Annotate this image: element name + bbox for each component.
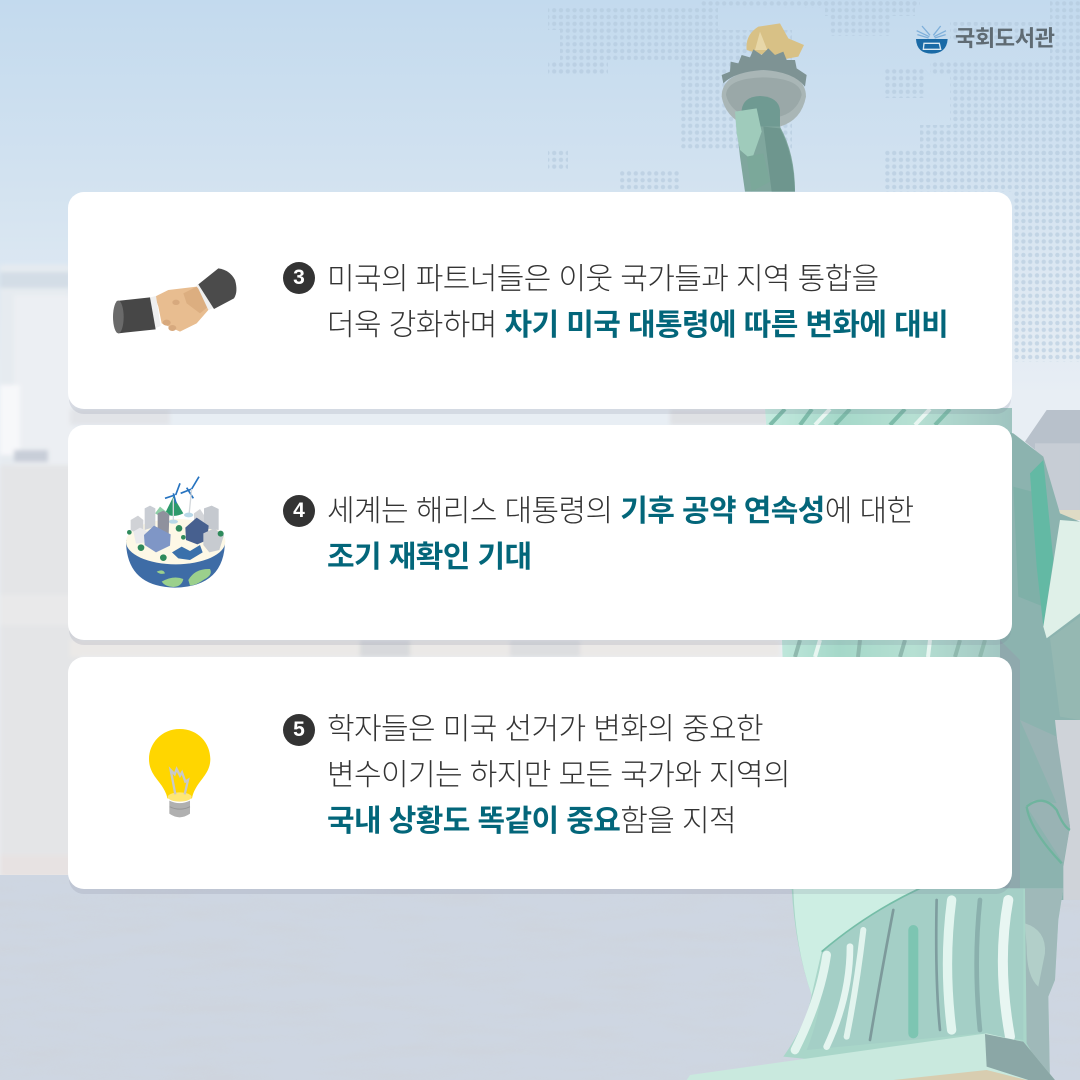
statue: robe and base [687,888,1063,1080]
statue: upper body behind cards [765,408,1012,890]
panel: item 3 [68,192,1012,409]
number badge 4: 4 [293,499,305,522]
text: item 5: 학자들은 미국 선거가 변화의 중요한 [327,713,763,746]
number badge 5 [283,714,315,746]
number badge 5: 5 [293,718,305,741]
number badge 3: 3 [293,266,305,289]
statue: torch and arm [722,23,807,192]
text: item 5: 변수이기는 하지만 모든 국가와 지역의 [327,759,790,792]
dotted world map [548,0,1080,362]
text: item 4: 조기 재확인 기대 [327,541,531,574]
text: item 4 [327,495,913,574]
right strip: building and statue side [1000,410,1080,900]
city skyline [0,265,780,877]
water [0,875,1080,1080]
logo: National Assembly Library [916,26,1055,54]
icon: light bulb [149,729,210,818]
text: item 5 [327,713,790,838]
number badge 3 [283,262,315,294]
text: item 3: 미국의 파트너들은 이웃 국가들과 지역 통합을 [327,263,879,296]
panel: item 5 [68,657,1012,889]
icon: green city on globe [126,476,226,588]
panel: item 4 [68,425,1012,640]
text: item 3: 더욱 강화하며 차기 미국 대통령에 따른 변화에 대비 [327,309,948,342]
text: item 3 [327,263,948,342]
text: item 4: 세계는 해리스 대통령의 기후 공약 연속성에 대한 [327,495,913,528]
number badge 4 [283,495,315,527]
icon: handshake [113,268,236,334]
text: item 5: 국내 상황도 똑같이 중요함을 지적 [327,805,736,838]
icon: book emblem [916,26,948,54]
logo text: 국회도서관 [955,26,1055,51]
